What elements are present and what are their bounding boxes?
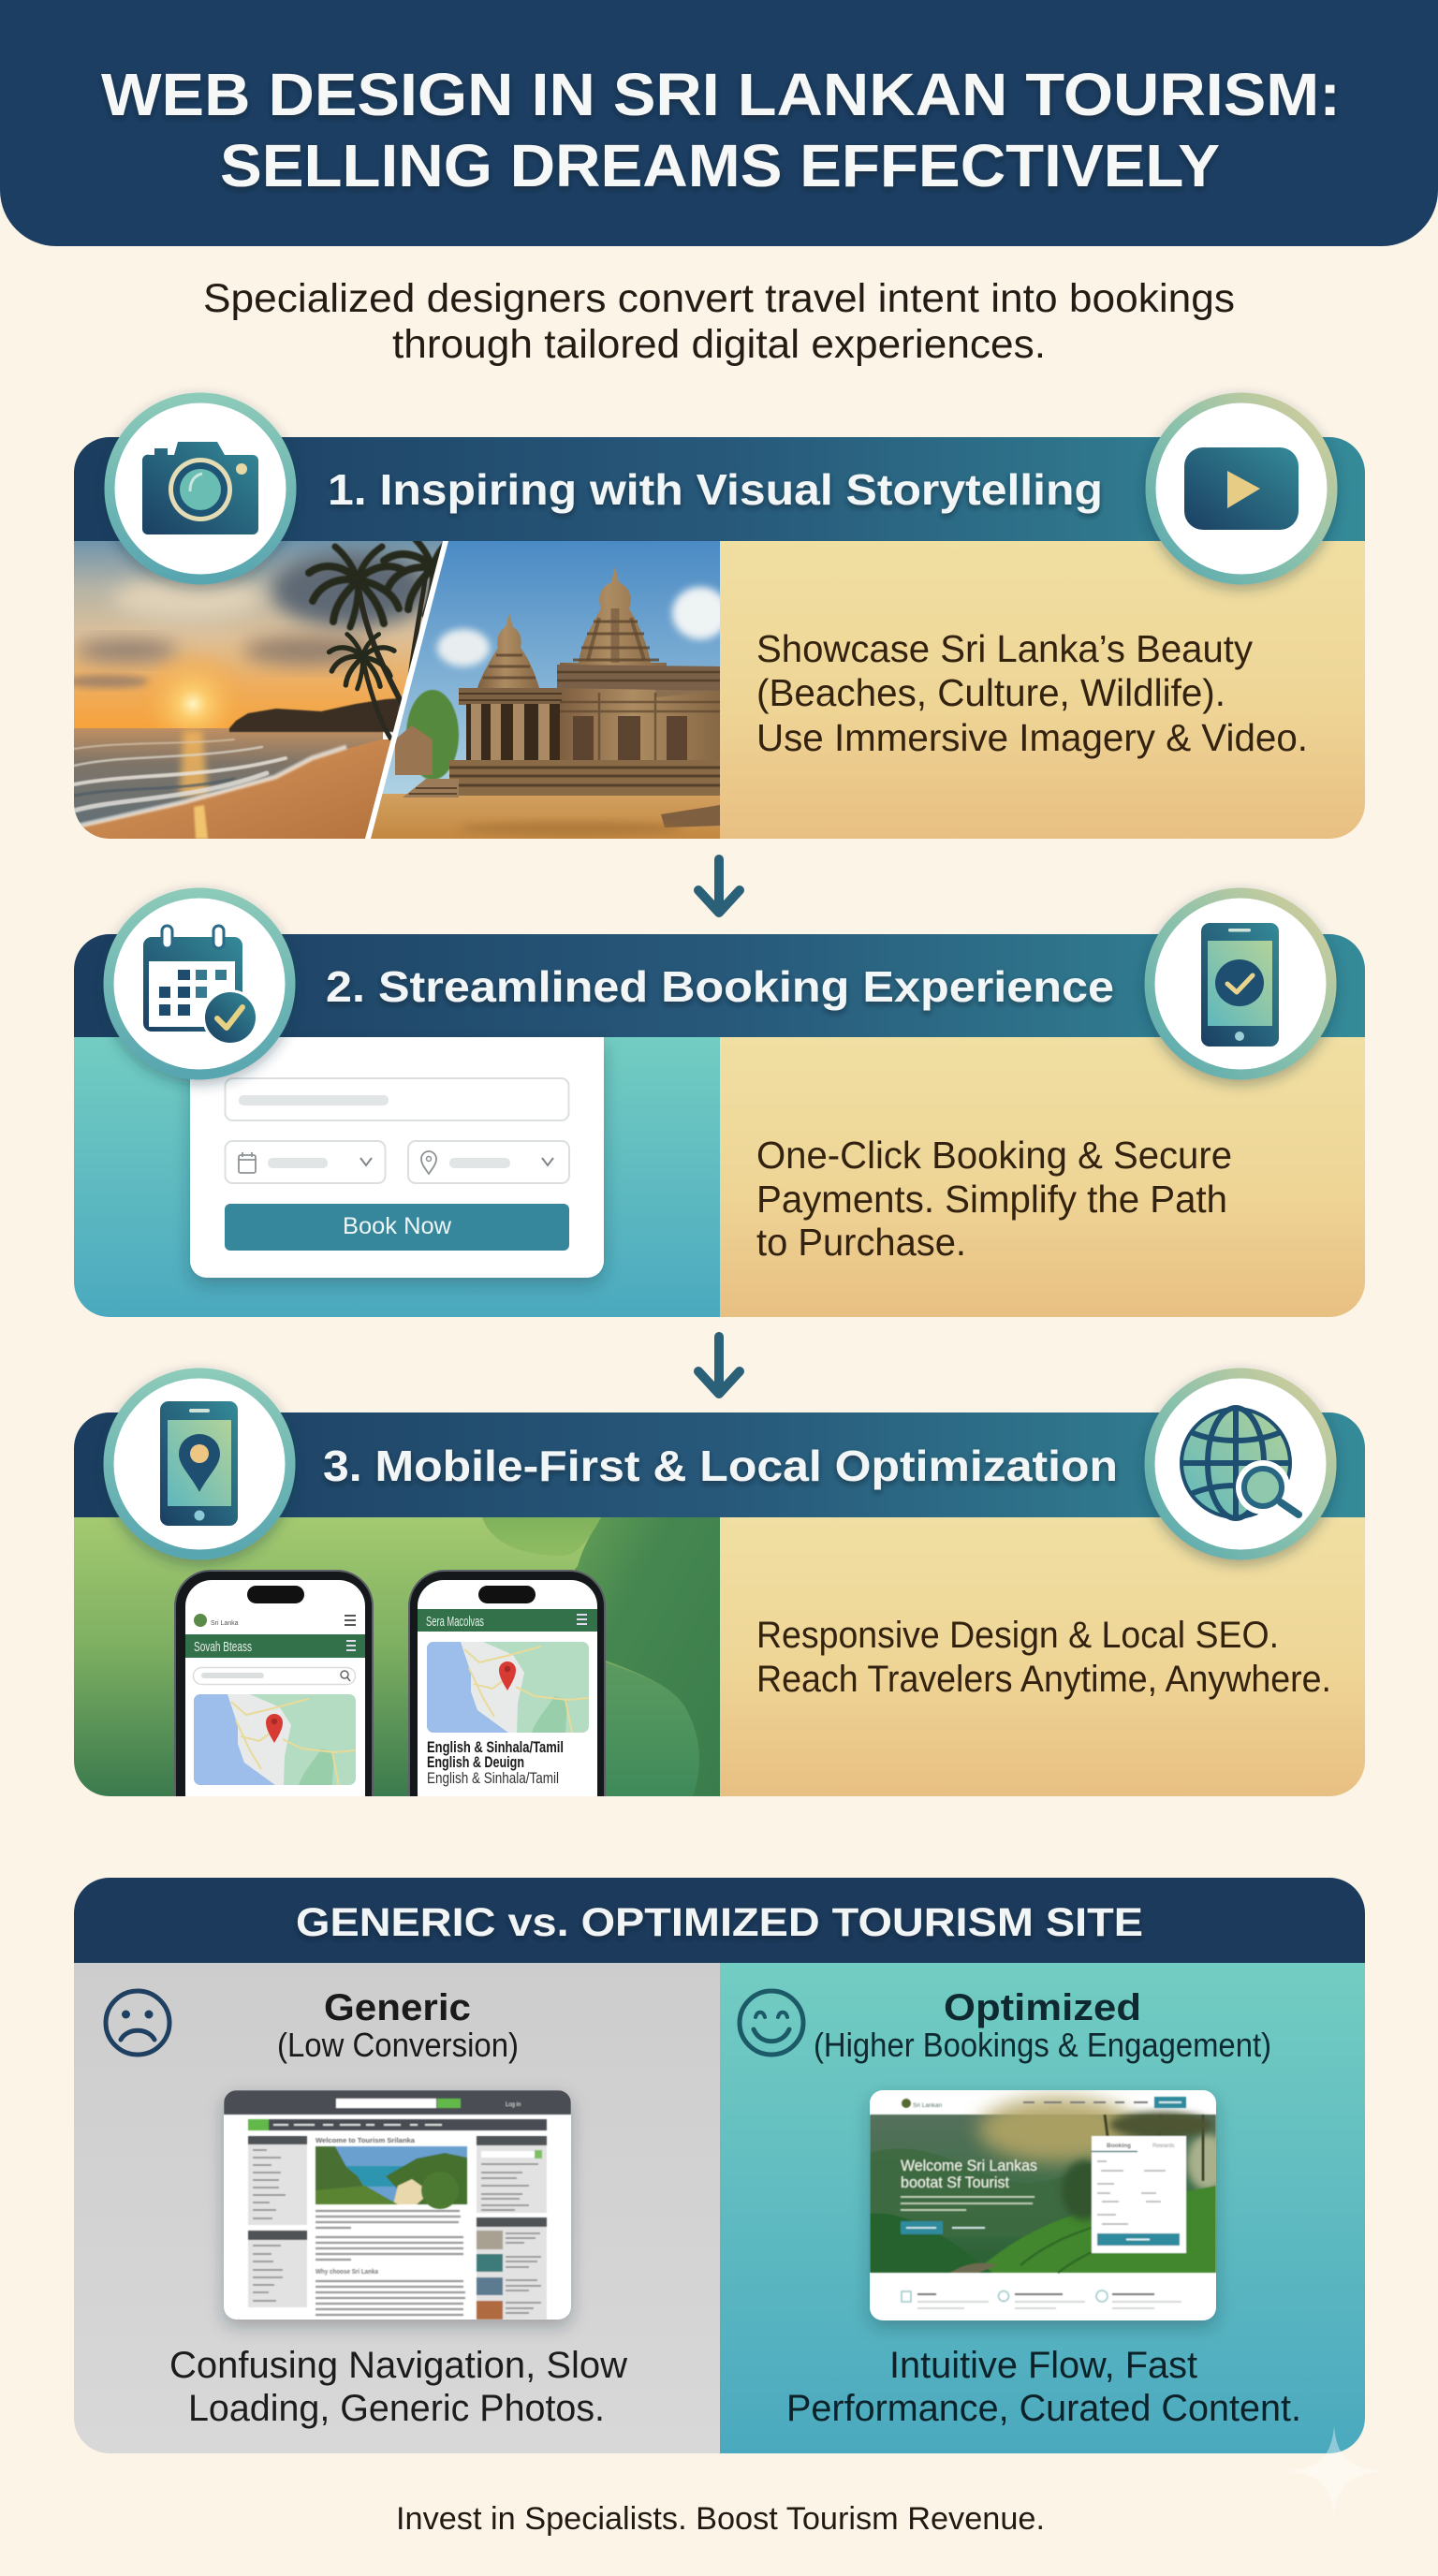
- icon: sad face: [106, 1991, 169, 2055]
- generic site mockup: Log in: [506, 2102, 521, 2108]
- subtitle: through tailored digital experiences.: [392, 322, 1046, 367]
- body text: booking: Payments. Simplify the Path: [756, 1178, 1227, 1221]
- temple tower: side: [477, 613, 539, 688]
- body text: visual storytelling: Showcase Sri Lanka’s Beauty: [756, 627, 1253, 670]
- caption: generic: [169, 2345, 627, 2429]
- optimized site mockup: bootat Sf Tourist: [901, 2174, 1009, 2191]
- body text: booking: to Purchase.: [756, 1221, 966, 1264]
- subtitle: [203, 276, 1235, 367]
- label: optimized: [814, 1987, 1271, 2064]
- icon: mobile location pin: [109, 1373, 290, 1555]
- button: book now: [225, 1204, 569, 1251]
- icon: video play: [1151, 398, 1332, 579]
- footer tagline: Invest in Specialists. Boost Tourism Revenue.: [396, 2501, 1045, 2537]
- phone mockup: map and languages: English & Deuign: [427, 1754, 524, 1771]
- body text: mobile-first: Reach Travelers Anytime, Anywhere.: [756, 1659, 1331, 1700]
- column: generic: [74, 1963, 720, 2453]
- optimized booking widget: [1092, 2136, 1186, 2253]
- arrow: step 1 to 2: [698, 859, 740, 913]
- panel: visual storytelling: [66, 398, 1365, 842]
- phone mockup: map and languages: English & Sinhala/Tamil: [427, 1770, 559, 1787]
- body text: booking: One-Click Booking & Secure: [756, 1134, 1232, 1177]
- panel: generic vs optimized comparison: [74, 1878, 1365, 2453]
- column: optimized: [720, 1963, 1365, 2453]
- heading: comparison: GENERIC vs. OPTIMIZED TOURISM SITE: [296, 1900, 1143, 1945]
- title: WEB DESIGN IN SRI LANKAN TOURISM:: [101, 61, 1341, 128]
- label: generic: [277, 1987, 519, 2064]
- optimized booking widget: Rewards: [1152, 2144, 1175, 2149]
- phone mockup: map and languages: English & Sinhala/Tamil: [427, 1739, 564, 1756]
- body text: mobile-first: [756, 1615, 1331, 1700]
- body text: visual storytelling: [756, 627, 1308, 759]
- body text: mobile-first: Responsive Design & Local SEO.: [756, 1615, 1279, 1656]
- panel: booking experience: [74, 893, 1365, 1317]
- icon: calendar check: [109, 893, 290, 1075]
- body text: booking: [756, 1134, 1232, 1264]
- caption: optimized: Performance, Curated Content.: [786, 2388, 1301, 2429]
- phone mockup: search and map: [174, 1570, 374, 1796]
- section header: mobile-first: [74, 1412, 1365, 1517]
- body text: visual storytelling: Use Immersive Imagery & Video.: [756, 716, 1308, 759]
- section header: visual storytelling: [74, 437, 1365, 541]
- booking form mockup: [190, 1037, 604, 1278]
- photo: beach at sunset: [74, 541, 443, 839]
- label: generic: Generic: [324, 1987, 471, 2028]
- icon: globe with magnifier: [1150, 1373, 1331, 1555]
- caption: generic: Loading, Generic Photos.: [188, 2388, 605, 2429]
- button: book now: Book Now: [343, 1213, 452, 1239]
- heading: visual storytelling: 1. Inspiring with Visual Storytelling: [328, 465, 1103, 514]
- heading: booking: 2. Streamlined Booking Experience: [326, 962, 1114, 1011]
- section header: booking: [74, 934, 1365, 1037]
- title: [101, 61, 1341, 199]
- panel: mobile-first: [74, 1373, 1365, 1833]
- phone mockup: map and languages: [408, 1570, 606, 1796]
- generic site mockup: Why choose Sri Lanka: [315, 2267, 379, 2276]
- generic photo: bay: [315, 2146, 467, 2209]
- photo: ancient temple: [360, 541, 728, 841]
- arrow: step 2 to 3: [698, 1337, 740, 1394]
- icon: camera: [110, 398, 291, 579]
- optimized site mockup: Welcome Sri Lankas: [901, 2157, 1037, 2174]
- phone mockup: map and languages: Sera Macolvas: [426, 1614, 484, 1630]
- optimized site mockup: Sri Lankan: [913, 2102, 942, 2109]
- title: SELLING DREAMS EFFECTIVELY: [220, 132, 1220, 199]
- label: optimized: Optimized: [944, 1987, 1141, 2028]
- label: generic: (Low Conversion): [277, 2026, 519, 2064]
- optimized hero: tea hills: [870, 2097, 1228, 2273]
- generic site mockup: Welcome to Tourism Srilanka: [315, 2136, 416, 2144]
- body text: visual storytelling: (Beaches, Culture, Wildlife).: [756, 671, 1225, 714]
- heading: mobile-first: 3. Mobile-First & Local Optimization: [323, 1442, 1118, 1490]
- icon: mobile check: [1150, 893, 1331, 1075]
- caption: optimized: Intuitive Flow, Fast: [889, 2345, 1197, 2386]
- comparison header: [74, 1878, 1365, 1963]
- caption: optimized: [786, 2345, 1301, 2429]
- label: optimized: (Higher Bookings & Engagement): [814, 2026, 1271, 2064]
- generic site mockup: [224, 2090, 571, 2320]
- optimized booking widget: Booking: [1107, 2143, 1131, 2149]
- phone mockup: search and map: Sri Lanka: [211, 1620, 239, 1627]
- optimized site mockup: [870, 2090, 1228, 2320]
- title banner: [0, 0, 1438, 246]
- icon: sparkle: [1287, 2426, 1381, 2516]
- icon: happy face: [740, 1991, 803, 2055]
- temple tower: main: [560, 566, 667, 666]
- phone mockup: search and map: Sovah Bteass: [194, 1639, 252, 1655]
- caption: generic: Confusing Navigation, Slow: [169, 2345, 627, 2386]
- subtitle: Specialized designers convert travel intent into bookings: [203, 276, 1235, 321]
